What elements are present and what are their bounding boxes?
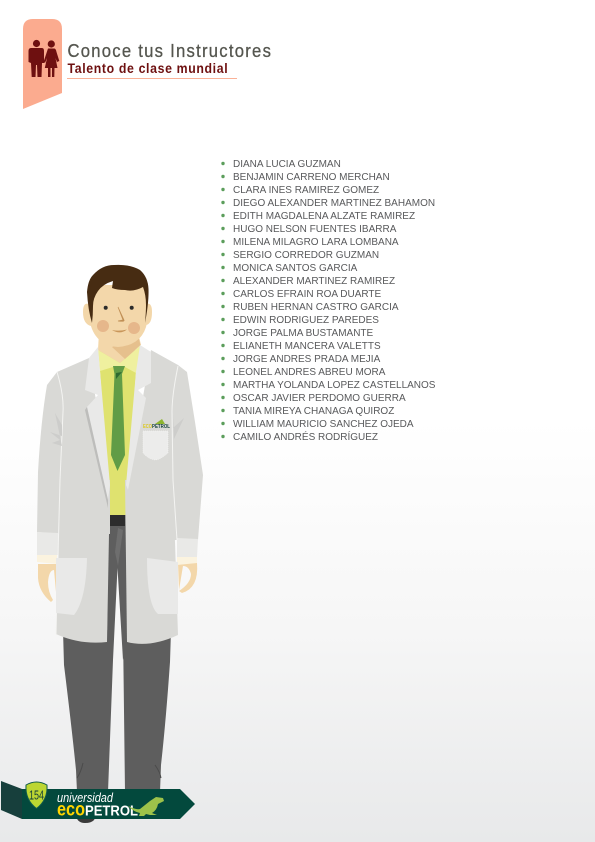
footer banner: universidad ecopetrol: eco [57,800,85,820]
right hand [178,563,197,593]
list of instructors: SERGIO CORREDOR GUZMAN [233,250,379,261]
face [89,285,148,347]
title: Conoce tus Instructores [68,40,271,61]
cheeks [97,320,109,332]
icon: iguana [128,797,164,816]
list of instructors: TANIA MIREYA CHANAGA QUIROZ [233,406,394,417]
lapel right [126,345,151,490]
coat back: sleeves and torso [37,358,110,534]
belt [110,514,125,526]
list of instructors: WILLIAM MAURICIO SANCHEZ OJEDA [233,419,414,430]
chest logo [143,419,170,430]
subtitle: Talento de clase mundial [68,60,228,76]
list of instructors: BENJAMIN CARRENO MERCHAN [233,172,390,183]
list of instructors: HUGO NELSON FUENTES IBARRA [233,224,397,235]
list of instructors: OSCAR JAVIER PERDOMO GUERRA [233,393,406,404]
list of instructors: DIEGO ALEXANDER MARTINEZ BAHAMON [233,198,435,209]
subtitle underline [67,77,237,80]
eyes [104,306,108,310]
footer banner: universidad ecopetrol: PETROL [85,802,138,820]
lapel left [85,347,110,500]
trousers [63,630,113,792]
list of instructors: CARLOS EFRAIN ROA DUARTE [233,289,382,300]
coat seam lines [56,366,178,634]
cuffs [37,532,58,555]
coat lower right panel [125,480,178,644]
sleeve wrinkles [50,413,184,446]
chest logo: PETROL [152,424,170,430]
chest pocket [143,431,168,460]
list of instructors: EDWIN RODRIGUEZ PAREDES [233,315,379,326]
neck [98,332,141,363]
list of instructors: ALEXANDER MARTINEZ RAMIREZ [233,276,395,287]
illustration: instructor in lab coat [37,265,203,823]
list of instructors: CLARA INES RAMIREZ GOMEZ [233,185,379,196]
chest logo: ECO [143,424,152,430]
coat lower left panel [56,480,110,643]
shoe [75,812,96,823]
mouth [112,330,127,332]
list of instructors: JORGE PALMA BUSTAMANTE [233,328,374,339]
list of instructors: DIANA LUCIA GUZMAN [233,159,341,170]
list of instructors: RUBEN HERNAN CASTRO GARCIA [233,302,399,313]
list of instructors: CAMILO ANDRÉS RODRÍGUEZ [233,430,378,443]
left hand [38,564,56,602]
list of instructors: MILENA MILAGRO LARA LOMBANA [233,237,399,248]
hair [87,265,149,323]
badge: 154 shield [26,782,47,808]
shirt [99,350,140,515]
logo wordmark: universidad [57,790,114,805]
list of instructors: EDITH MAGDALENA ALZATE RAMIREZ [233,211,415,222]
header ribbon with people icon [23,19,62,109]
left coat pocket [56,558,87,615]
icon: man and woman [28,40,59,77]
shirt collar [98,345,141,373]
nose [118,307,124,321]
ears [83,304,152,326]
list of instructors [221,159,436,443]
right coat pocket [147,558,178,614]
list of instructors: MONICA SANTOS GARCIA [233,263,358,274]
list of instructors: LEONEL ANDRES ABREU MORA [233,367,386,378]
list of instructors: JORGE ANDRES PRADA MEJIA [233,354,381,365]
necktie [111,366,125,471]
list of instructors: ELIANETH MANCERA VALETTS [233,341,381,352]
footer banner: universidad ecopetrol [1,781,195,820]
badge: 154 shield: 154 [29,788,44,802]
list of instructors: MARTHA YOLANDA LOPEZ CASTELLANOS [233,380,436,391]
